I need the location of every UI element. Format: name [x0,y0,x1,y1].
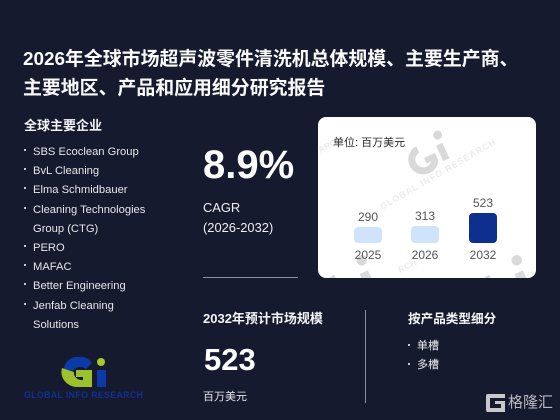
company list [24,146,145,331]
unit label: 单位: 百万美元 [333,137,405,149]
heading: top companies: 全球主要企业 [24,118,102,133]
logo text: GLOBAL INFO RESEARCH [24,390,143,400]
company list: Elma Schmidbauer [33,184,128,196]
product type list: 多槽 [417,359,439,371]
title [23,48,518,99]
company list: Cleaning Technologies [33,204,145,216]
panel: top companies: PERO [33,242,65,254]
market size value: 523 [204,342,256,377]
watermark text: 格隆汇 [508,394,553,411]
bar: 2032: 523 [473,196,493,210]
CAGR label: (2026-2032) [203,220,273,235]
panel: top companies [24,118,145,331]
company list: BvL Cleaning [33,165,99,177]
panel: top companies: Jenfab Cleaning [33,300,114,312]
bar: 2025: 2025 [355,248,381,262]
product type list [408,340,439,371]
panel: product types [408,312,496,371]
watermark: Gelonghui [486,394,553,412]
company list: SBS Ecoclean Group [33,146,139,158]
title: 主要地区、产品和应用细分研究报告 [23,78,325,99]
CAGR stat [203,143,298,278]
panel: top companies: MAFAC [33,261,72,273]
watermark: GLOBAL INFO RESEARCH [378,137,498,212]
CAGR label: CAGR [203,200,240,215]
watermark: RCH [396,257,418,275]
icon: Gi mark [61,357,106,387]
panel: top companies: Group (CTG) [33,223,98,235]
heading: product types: 按产品类型细分 [408,312,496,326]
panel: 2032 market size [203,311,323,403]
product type list: 单槽 [417,340,439,352]
logo: Global Info Research [24,357,143,400]
panel: bar chart [318,117,536,278]
heading: market size: 2032年预计市场规模 [203,311,323,326]
bar: 2026: 313 [415,209,435,223]
icon: G mark [486,394,505,412]
watermark [318,130,526,278]
title: 2026年全球市场超声波零件清洗机总体规模、主要生产商、 [23,48,518,70]
panel: top companies: Better Engineering [33,280,126,292]
bar: 2032 [469,196,497,262]
bar: 2026: 2026 [412,248,438,262]
bar: 2025: 290 [358,210,378,224]
bar: 2025 [354,210,382,262]
CAGR label [203,200,273,235]
CAGR value: 8.9% [203,143,294,187]
market size unit: 百万美元 [203,391,247,403]
panel: top companies: Solutions [33,319,79,331]
bar: 2032: 2032 [470,248,496,262]
bar: 2026 [411,209,439,262]
